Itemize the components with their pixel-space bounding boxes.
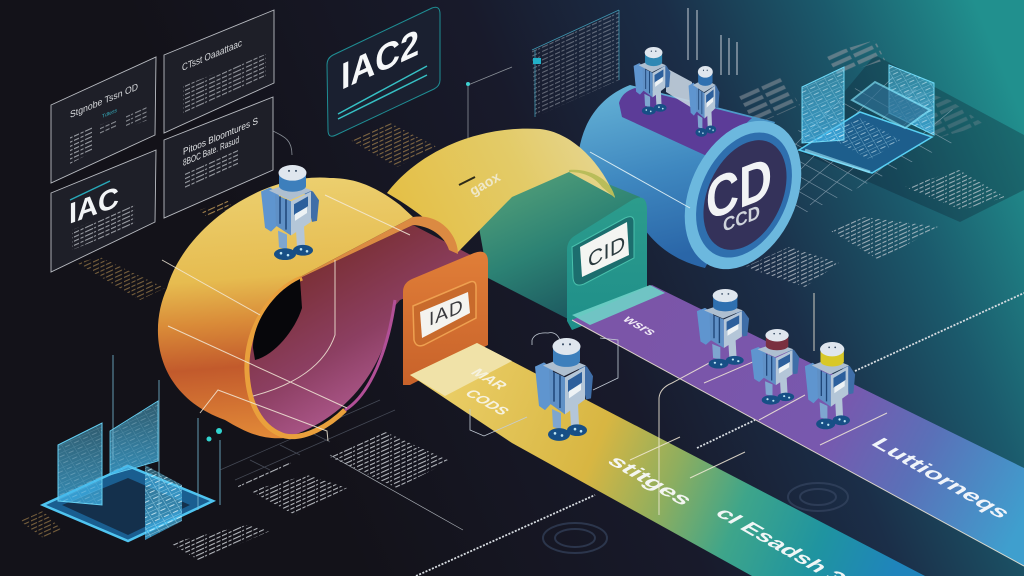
white annotation lines: [162, 195, 1024, 566]
second arc rim: [569, 170, 615, 198]
cylinder face outer: [662, 102, 824, 288]
cylinder face centre: [687, 127, 803, 263]
cylinder edge rule: [590, 152, 690, 208]
accent lines: [338, 66, 427, 119]
grey label rows middle right: [900, 85, 985, 140]
holographic laptop right: [799, 65, 934, 173]
robot bridge between cylinder robots: [666, 68, 692, 108]
panel heading: Stgnobe: Stgnobe Tssn OD: [70, 82, 138, 121]
panel text lines: [70, 127, 92, 164]
CID box frame: [567, 198, 647, 330]
ring outer edge magenta: [345, 300, 395, 410]
faint round emblems: [543, 483, 848, 553]
panel text lines: [72, 203, 135, 250]
faint grid under ring: [220, 400, 395, 480]
label: CD: CD: [706, 144, 772, 234]
IAD orange box: [403, 252, 488, 385]
grey label rows near robots: [735, 75, 800, 125]
robot on purple strip 1: [697, 289, 749, 369]
panel: IAC: [51, 150, 156, 272]
connector lines from panels: [273, 67, 512, 155]
orange ring ribbon: [158, 178, 413, 438]
arc dark tag: [459, 177, 475, 185]
panel text lines: [184, 150, 238, 190]
strip label: stages: stitges: [602, 453, 698, 508]
panel: Ctsst Oaaattaac: [164, 10, 274, 133]
robot on cylinder right: [689, 66, 719, 137]
cylinder body: [579, 85, 775, 268]
purple strip tongue: [572, 285, 665, 325]
panel accent line: [70, 181, 110, 200]
ring inner wall: [247, 225, 490, 438]
panel heading: Pitoos: Pitoos Bloomtures S: [183, 116, 258, 158]
robot on purple strip 2: [751, 329, 799, 405]
box screen: [420, 292, 470, 338]
purple strip label: lutti: Luttiorneqs: [866, 435, 1016, 521]
second yellow arc: [387, 129, 615, 253]
robot on purple strip 3: [805, 342, 855, 429]
panel subheading: 8BOC Bate. Rasud: [183, 135, 239, 169]
cyan nodes: [206, 428, 222, 442]
micro text blocks: [20, 123, 1005, 561]
yellow strip tongue: [410, 343, 512, 396]
panel: Stgnobe: [51, 57, 156, 183]
floor plane right: [796, 55, 1024, 222]
floor grid right: [794, 77, 953, 212]
ring hole: [253, 279, 302, 360]
label: CID: CID: [588, 230, 626, 273]
purple strip label: ulaq: wsrs: [619, 313, 661, 338]
robot on cylinder left: [634, 47, 670, 115]
robot on yellow ring: [261, 165, 319, 260]
long dashed line: [416, 293, 1024, 576]
code panel top: [532, 10, 619, 117]
label: IAD: IAD: [429, 295, 464, 331]
panel text lines third column: [126, 105, 148, 128]
panel heading: IAC: IAC: [69, 181, 119, 231]
first arch rim: [300, 217, 458, 278]
frame: [567, 198, 647, 330]
panel heading: Ctsst: CTsst Oaaattaac: [182, 38, 242, 74]
box frame: [403, 252, 488, 385]
panel text lines second column: [100, 118, 117, 136]
box screen border: [413, 282, 476, 346]
CD cylinder: [579, 85, 824, 288]
ring inner rim: [247, 278, 345, 437]
panel text lines: [183, 54, 266, 115]
yellow strip: [410, 343, 925, 576]
cylinder face ring: [677, 117, 811, 273]
screen: [580, 222, 629, 277]
connector node: [466, 82, 470, 86]
yellow strip label: MAR: MAR: [467, 367, 511, 392]
connector to robot 4: [470, 333, 618, 436]
yellow strip label: CODS: CODS: [461, 388, 513, 418]
long thin rule: [330, 455, 463, 530]
purple strip: [572, 285, 1024, 566]
heading: IAC2: IAC2: [341, 22, 419, 99]
robot on yellow strip: [535, 338, 593, 441]
teal left wall of CID box: [478, 168, 647, 321]
panel: Pitoos Bloomtures: [164, 97, 273, 218]
panel label: teal tag: Tdtess: [102, 108, 117, 120]
screen backing: [572, 217, 634, 285]
label: CCD: CCD: [723, 202, 760, 237]
instrument pins above cylinder: [688, 8, 737, 75]
strip label: CI: cI Esadsh 3: [710, 505, 851, 576]
garbled label on arc: gaox: [467, 168, 503, 199]
holographic laptop left: [43, 355, 220, 541]
panel: IAC2: [327, 7, 440, 136]
cylinder top panel: [619, 88, 752, 157]
grey label rows top right: [825, 40, 885, 75]
